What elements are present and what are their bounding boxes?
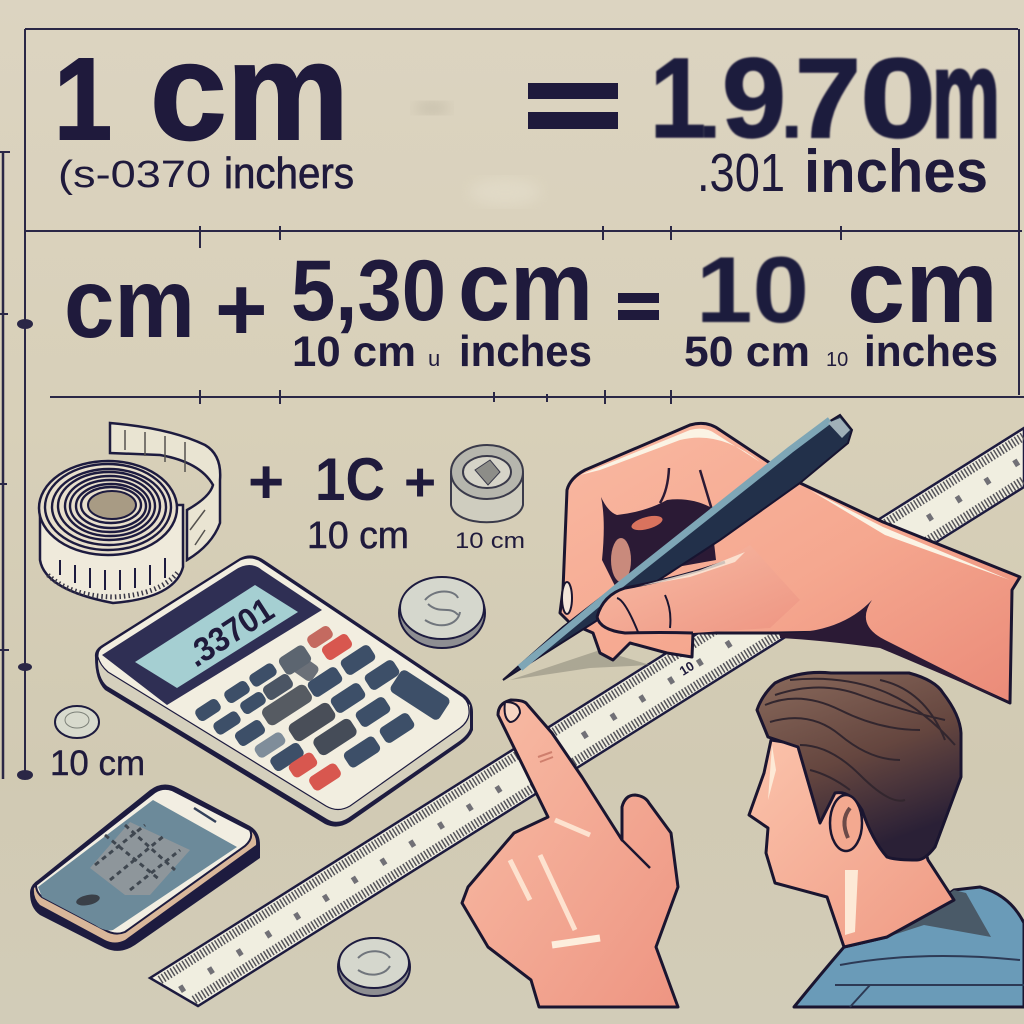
text: left inches note: inchers — [224, 149, 354, 198]
heading: 1 cm: cm — [150, 15, 349, 169]
equation row: u — [428, 346, 440, 371]
text: right inches note: inches — [804, 138, 988, 205]
text: left inches note: (s-0370 — [58, 154, 211, 196]
heading: right result: . — [782, 74, 801, 152]
text: ruler label: 10 — [677, 658, 697, 679]
icon: tape measure — [39, 423, 220, 603]
heading: 1 cm: 1 — [54, 34, 112, 164]
text: small sum — [248, 446, 525, 557]
equation row: + — [215, 260, 268, 360]
illustration: man profile — [749, 672, 1024, 1007]
equation row: 10 — [696, 237, 809, 342]
heading: right result — [650, 26, 1000, 164]
icon: calculator: .33701 — [180, 591, 281, 675]
shadow under pen — [510, 650, 650, 680]
heading: right result: 0 — [860, 35, 936, 161]
panel: top equation frame — [0, 29, 1024, 779]
heading: right result: 9 — [722, 35, 786, 161]
icon: coin bottom — [338, 938, 410, 996]
heading: right result: . — [700, 74, 719, 152]
equals sign top — [528, 83, 618, 129]
heading: 1 cm — [54, 15, 349, 169]
text: small sum: + — [404, 451, 436, 513]
icon: pointing hand — [462, 700, 678, 1007]
equation row: cm — [64, 248, 195, 358]
icon: ruler — [150, 428, 1024, 1006]
icon: small coin — [55, 706, 99, 738]
text: right inches note — [697, 138, 988, 205]
icon: coin — [399, 577, 485, 648]
equation row: cm — [847, 229, 998, 345]
equation row: inches — [459, 327, 592, 376]
text: right inches note: .301 — [697, 143, 785, 203]
equation row: 50 cm — [684, 328, 810, 376]
text: small sum: 10 cm — [455, 528, 525, 553]
heading: right result: 1 — [650, 35, 706, 161]
equation row — [64, 229, 998, 376]
text: small sum: 10 cm — [307, 515, 409, 557]
equation row: cm — [458, 231, 593, 341]
equation row: inches — [864, 327, 998, 376]
equation row: 10 — [826, 349, 848, 371]
icon: smartphone — [30, 784, 260, 951]
icon: writing hand and pen — [503, 415, 1020, 703]
text: 10 cm label: 10 cm — [50, 744, 145, 783]
equation row: 10 cm — [292, 328, 416, 376]
equation row: 5,30 — [291, 243, 446, 339]
heading: right result: 7 — [795, 35, 861, 161]
text: left inches note — [58, 149, 354, 198]
icon: coin stack — [451, 445, 523, 522]
icon: calculator — [95, 555, 473, 827]
text: small sum: + — [248, 448, 284, 517]
text: small sum: 1C — [315, 446, 385, 513]
